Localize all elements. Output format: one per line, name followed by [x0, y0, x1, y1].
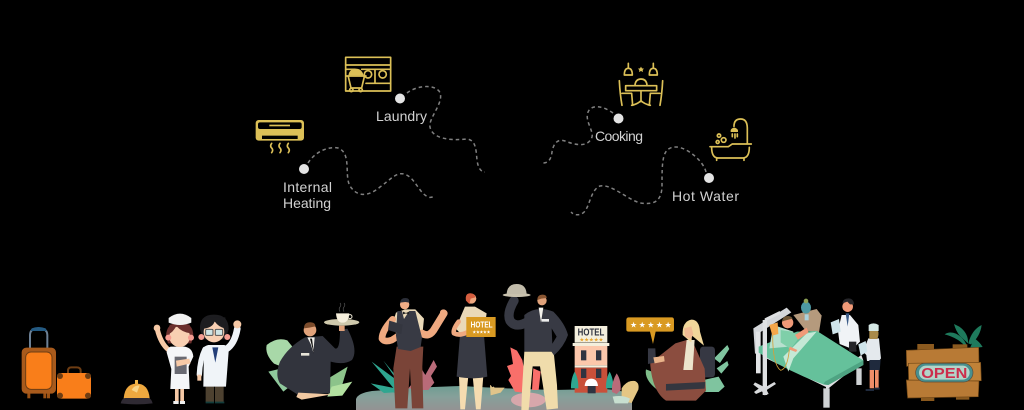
- label: hot water: Hot Water: [672, 188, 739, 204]
- illustration: platform: [356, 386, 632, 410]
- connector: cooking path: [543, 107, 613, 163]
- illustration: hostess with hotel sign: [454, 293, 496, 409]
- illustration: hospital patient and staff: [753, 298, 881, 408]
- illustration: fern and leaf behind waiter: [371, 360, 437, 396]
- icon: bathtub: [710, 119, 751, 160]
- icon: luggage: [22, 327, 91, 399]
- label: internal heating: Heating: [283, 195, 331, 211]
- connector: internal heating path: [308, 148, 435, 197]
- illustration: open sign: OPEN: [921, 366, 967, 382]
- illustration: hostess with hotel sign: HOTEL: [471, 320, 493, 330]
- illustration: hostess with hotel sign: ★★★★★: [472, 329, 491, 334]
- label: cooking: Cooking: [595, 128, 643, 144]
- dot: cooking: [614, 114, 624, 124]
- doctor: [197, 315, 241, 403]
- illustration: waiter with coffee: [266, 303, 359, 400]
- illustration: hotel building: ★★★★★: [579, 338, 604, 344]
- illustration: open sign: [906, 324, 983, 401]
- dot: hot water: [704, 173, 714, 183]
- illustration: red leaf and waiter with cloche: [490, 284, 568, 410]
- icon: service bell: [121, 380, 153, 404]
- nurse: [154, 314, 194, 404]
- icon: dining table: [619, 63, 663, 105]
- label: internal heating: [283, 179, 332, 211]
- connector: laundry path: [407, 87, 485, 172]
- dot: laundry: [395, 94, 405, 104]
- illustration: hotel building: HOTEL: [578, 328, 604, 339]
- illustration: woman with phone and rating bubble: ★★★★★: [630, 321, 672, 330]
- illustration: waiter with menu: [382, 298, 447, 408]
- illustration: nurse and doctor: [154, 314, 241, 404]
- icon: air conditioner: [256, 120, 304, 153]
- label: laundry: Laundry: [376, 108, 427, 124]
- connector: hot water path: [571, 147, 706, 215]
- label: internal heating: Internal: [283, 179, 332, 195]
- illustration: woman with phone and rating bubble: [626, 317, 729, 401]
- illustration: hotel building: [571, 326, 639, 403]
- dot: internal heating: [299, 164, 309, 174]
- icon: laundry: [346, 57, 391, 92]
